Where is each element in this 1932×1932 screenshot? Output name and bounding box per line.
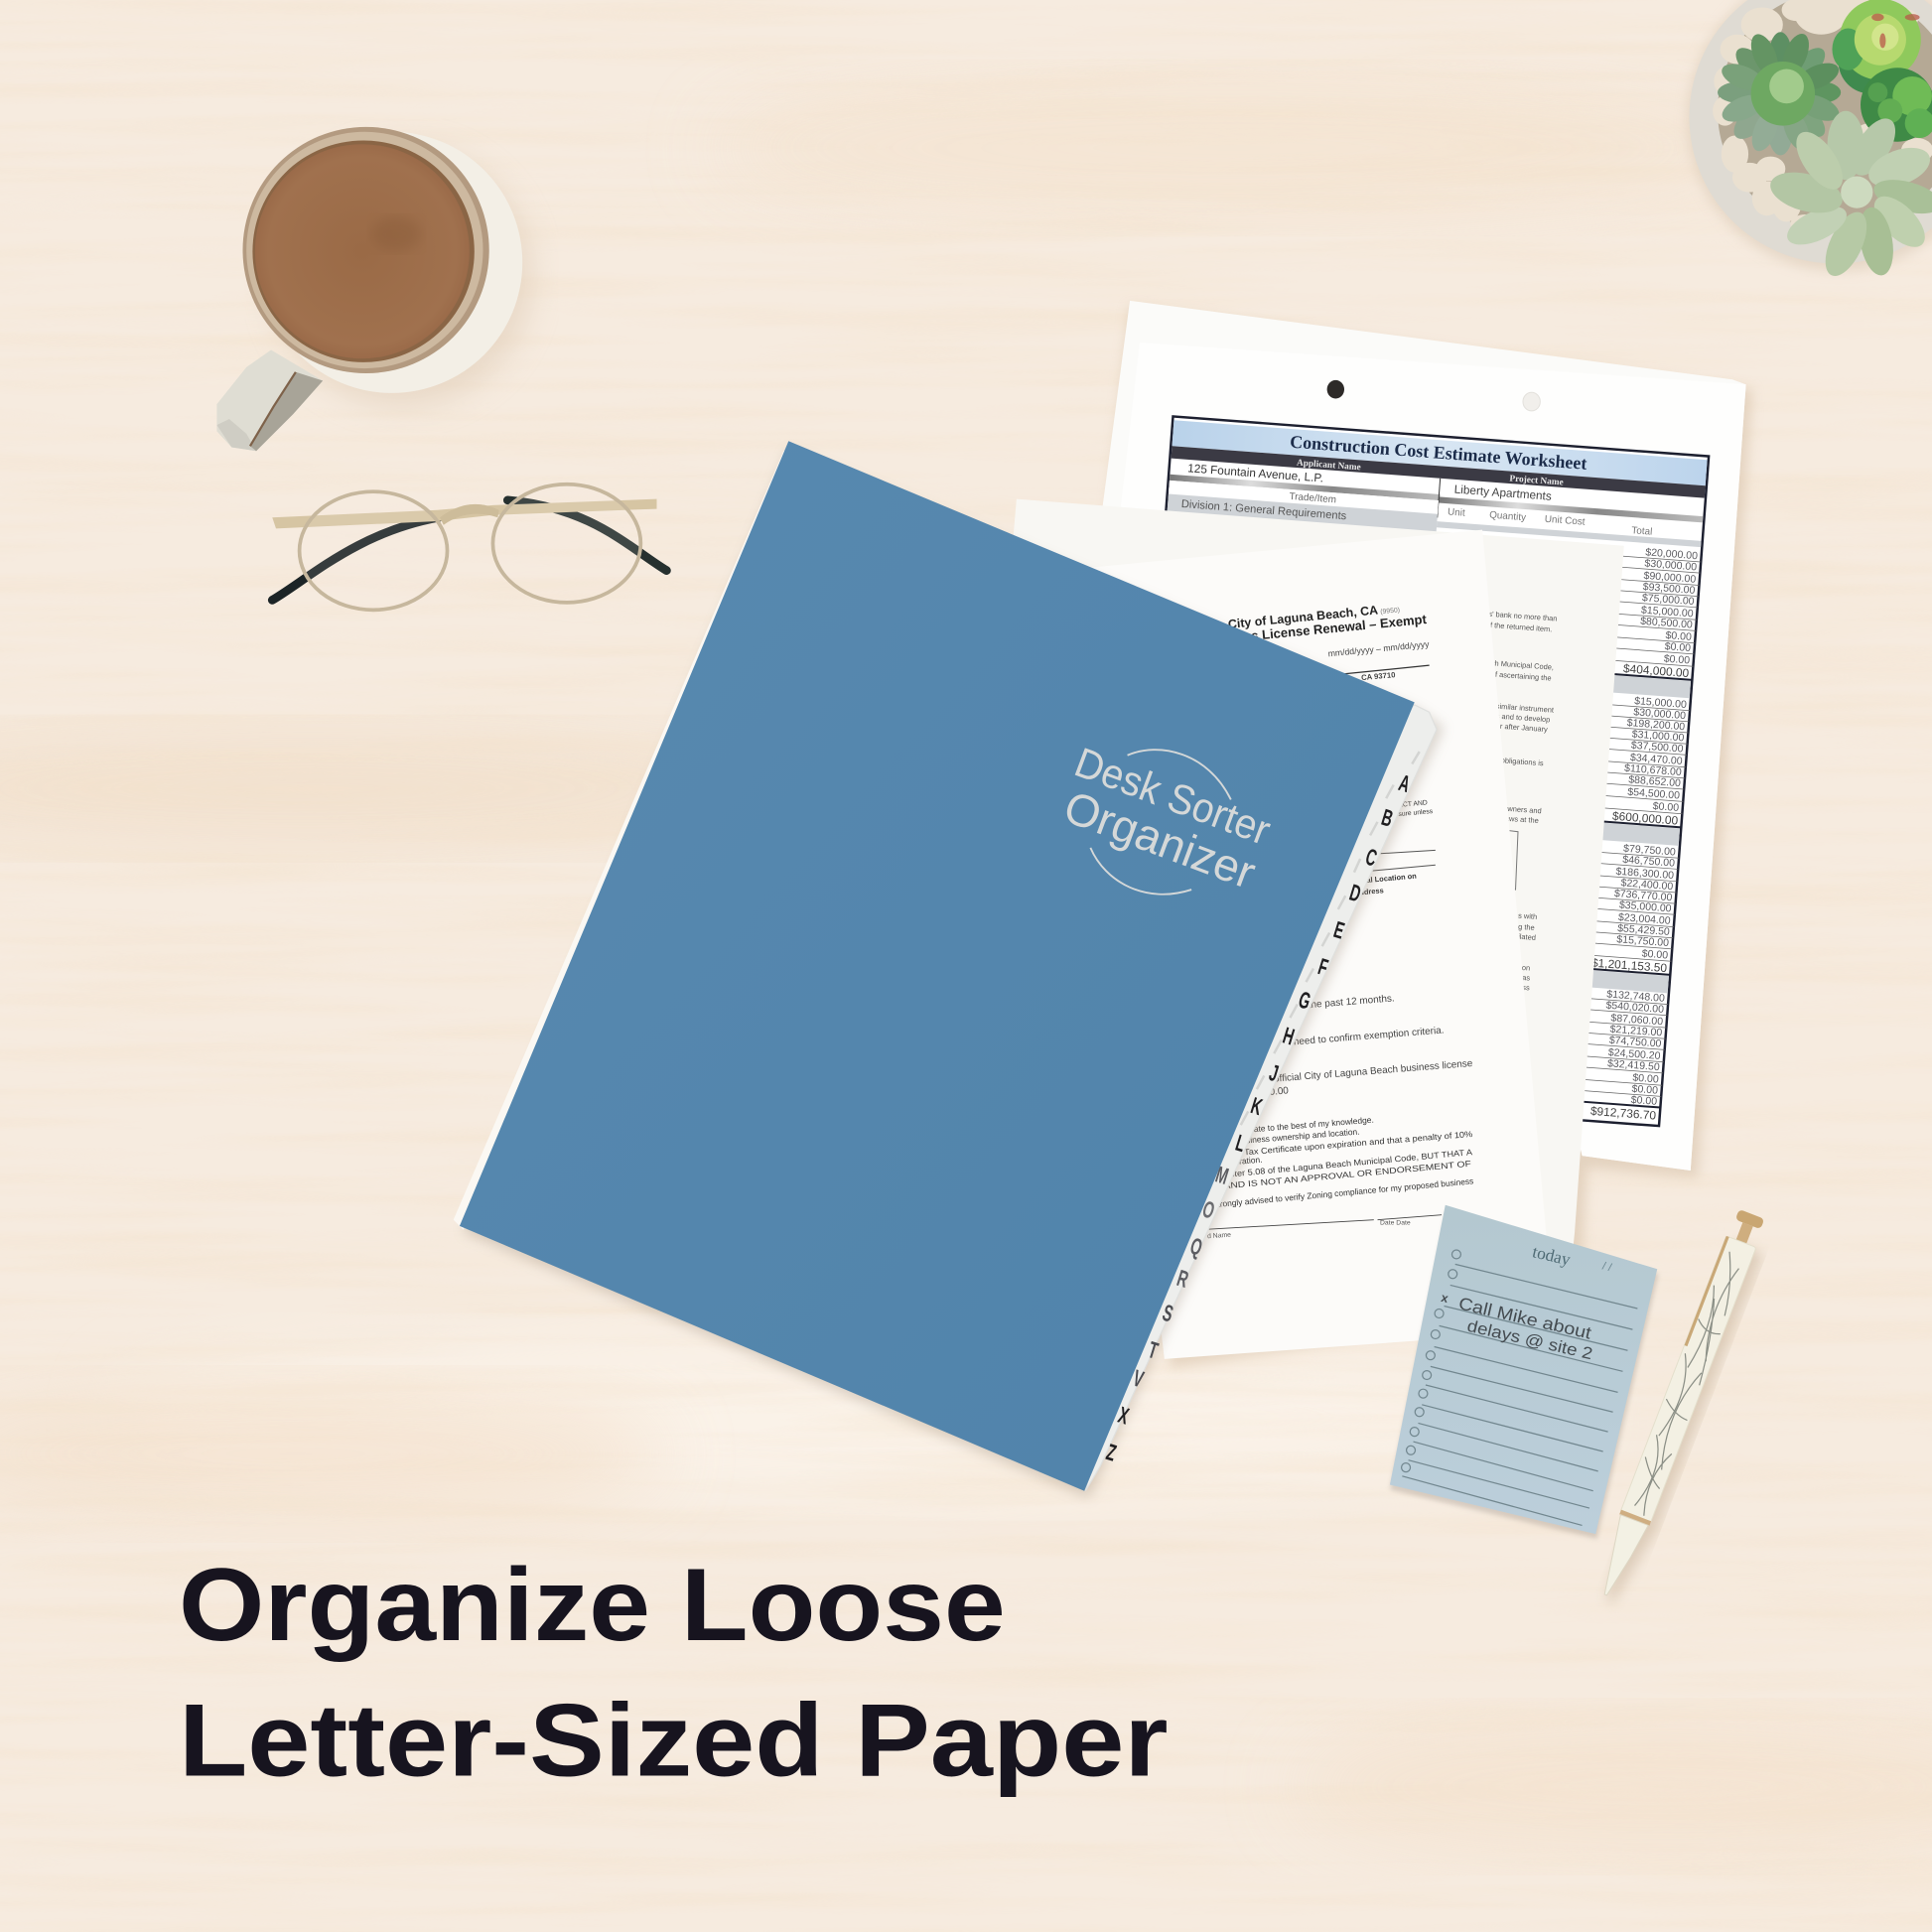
- book shadow: [464, 450, 1445, 1498]
- header rows: Applicant Name: [1297, 459, 1361, 473]
- section 4 amounts: $540,020.00: [1605, 1000, 1665, 1016]
- title band: [1173, 420, 1708, 485]
- section 1 amounts: $93,500.00: [1642, 581, 1696, 597]
- headline: Organize Loose: [179, 1548, 1006, 1663]
- note ruled lines and check circles: [1402, 1250, 1637, 1525]
- vellum sheet text: similar instrument: [1496, 702, 1555, 715]
- index tab strip: [1085, 705, 1437, 1491]
- form: City of Laguna Beach license renewal: $0.00: [1264, 1085, 1290, 1098]
- form declaration paragraph: AWS.: [1202, 1186, 1224, 1198]
- paper stack: [1013, 301, 1752, 1368]
- form declaration paragraph: and accurate to the best of my knowledge.: [1217, 1115, 1374, 1137]
- vellum sheet text: s and to develop: [1496, 712, 1551, 724]
- mug body: [261, 132, 522, 393]
- section 3 amounts: $55,429.50: [1617, 922, 1670, 938]
- tab letters: Q: [1187, 1233, 1205, 1262]
- section 2 amounts: $34,470.00: [1630, 752, 1683, 767]
- header rows: Trade/Item: [1289, 491, 1336, 505]
- logo: Desk Sorter Organizer: Desk Sorter: [1069, 739, 1277, 854]
- note handwriting: delays @ site 2: [1465, 1316, 1594, 1363]
- form declaration paragraph: ges in business ownership and location.: [1212, 1127, 1360, 1148]
- section 4 amounts: $32,419.50: [1607, 1057, 1660, 1073]
- section 2 amounts: $37,500.00: [1630, 740, 1684, 756]
- section 1 amounts: $15,000.00: [1641, 605, 1694, 620]
- section 2 amounts: $110,678.00: [1624, 762, 1682, 778]
- section 2 amounts: $198,200.00: [1626, 717, 1686, 733]
- form: City of Laguna Beach license renewal: L address: [1348, 886, 1384, 897]
- title band: Construction Cost Estimate Worksheet: [1290, 432, 1587, 474]
- section 3 amounts: $15,750.00: [1616, 933, 1670, 949]
- tab letters: A: [1396, 770, 1413, 798]
- tab letters: Z: [1103, 1440, 1119, 1467]
- logo: Desk Sorter Organizer: Organizer: [1057, 780, 1263, 898]
- tab letters: S: [1160, 1300, 1176, 1328]
- tab letters: E: [1330, 916, 1347, 945]
- form: City of Laguna Beach license renewal: Business License Renewal – Exempt: [1200, 612, 1428, 648]
- form declaration paragraph: nt.: [1207, 1206, 1217, 1217]
- vellum sheet text: eas: [1518, 973, 1531, 983]
- note shadow: [1390, 1210, 1658, 1539]
- section 3 amounts: $1,201,153.50: [1591, 956, 1668, 975]
- section 1 amounts: $0.00: [1663, 653, 1691, 666]
- section 1 amounts: $0.00: [1665, 629, 1692, 643]
- form: City of Laguna Beach license renewal: d Name: [1207, 1232, 1231, 1240]
- tab letters: K: [1248, 1093, 1265, 1121]
- form: City of Laguna Beach license renewal: Date Date: [1380, 1220, 1411, 1227]
- amount columns: [1129, 511, 1702, 1123]
- vellum sheet text: g the: [1518, 922, 1535, 932]
- header rows: Unit Cost: [1544, 514, 1586, 528]
- mug rim: [242, 127, 489, 373]
- section 1 amounts: $75,000.00: [1641, 592, 1695, 608]
- vellum sheet text: of the returned item.: [1486, 621, 1553, 633]
- succulent: right green: [1861, 68, 1932, 142]
- pen cap button: [1728, 1209, 1764, 1248]
- section 1 amounts: $90,000.00: [1643, 570, 1697, 586]
- tab letters: D: [1346, 880, 1364, 908]
- form: City of Laguna Beach license renewal: official City of Laguna Beach business license: [1274, 1058, 1473, 1085]
- header rows: 125 Fountain Avenue, L.P.: [1187, 462, 1324, 484]
- section 1 amounts: $0.00: [1664, 640, 1692, 654]
- form: City of Laguna Beach license renewal: closure unless: [1389, 808, 1434, 819]
- vellum sheet text: [1486, 610, 1558, 992]
- header rows: Unit: [1448, 506, 1465, 519]
- form: City of Laguna Beach license renewal: CA 93710: [1361, 670, 1396, 682]
- vellum sheet text: of ascertaining the: [1491, 669, 1552, 683]
- tab letters: H: [1280, 1023, 1298, 1050]
- tab letters: M: [1212, 1162, 1231, 1190]
- tab letters: J: [1266, 1060, 1282, 1087]
- section 3 amounts: $79,750.00: [1623, 843, 1676, 859]
- section 4 amounts: $21,219.00: [1609, 1024, 1663, 1038]
- section 4 amounts: $24,500.20: [1607, 1046, 1661, 1062]
- pen: [1588, 1208, 1775, 1608]
- section 3 amounts: $23,004.00: [1618, 911, 1671, 927]
- logo: Desk Sorter Organizer: [1057, 739, 1277, 898]
- tab letters: V: [1130, 1365, 1147, 1393]
- header rows: Division 1: General Requirements: [1180, 498, 1347, 522]
- section 3 amounts: $46,750.00: [1622, 854, 1675, 870]
- potted succulents: [1687, 0, 1932, 282]
- pen gold ring: [1619, 1510, 1651, 1526]
- pen barrel: [1620, 1236, 1756, 1524]
- worksheet sheet: [1119, 343, 1746, 1171]
- form declaration paragraph: after expiration.: [1204, 1155, 1263, 1169]
- tab letters: C: [1362, 844, 1380, 873]
- vellum sheet: [1013, 499, 1624, 1330]
- section 1 amounts: $404,000.00: [1623, 661, 1690, 680]
- form: City of Laguna Beach license renewal: Physical Location on: [1342, 872, 1418, 887]
- vellum sheet text: owners and: [1503, 804, 1542, 815]
- vellum sheet text: ch Municipal Code,: [1491, 658, 1554, 672]
- section 4 amounts: [1129, 936, 1669, 1123]
- vellum sheet text: ess: [1518, 983, 1530, 992]
- vellum sheet text: obligations is: [1500, 756, 1544, 767]
- vellum sheet text: ilated: [1518, 932, 1536, 942]
- pot: [1687, 0, 1932, 271]
- tab letters: F: [1315, 954, 1331, 982]
- succulent: bright green with red tips: [1832, 0, 1921, 93]
- paper shadow: [1084, 306, 1752, 1368]
- section 1 amounts: $30,000.00: [1644, 558, 1698, 573]
- headline: [179, 1548, 1169, 1798]
- section 3 amounts: $35,000.00: [1618, 899, 1672, 914]
- header rows: Quantity: [1489, 510, 1526, 523]
- form declaration paragraph: RE AND IS NOT AN APPROVAL OR ENDORSEMENT OF: [1207, 1159, 1471, 1192]
- note sheet: [1390, 1205, 1657, 1534]
- inner pages edge: [454, 449, 791, 1230]
- section 2 amounts: $0.00: [1652, 800, 1680, 814]
- tab letters: O: [1199, 1196, 1217, 1225]
- mug shadow: [271, 145, 532, 407]
- organizer book: [454, 441, 1445, 1498]
- pen shadow: [1597, 1242, 1763, 1608]
- pen tip: [1591, 1515, 1648, 1600]
- section 3 amounts: [1140, 789, 1680, 975]
- section 4 amounts: $74,750.00: [1608, 1035, 1662, 1050]
- section 2 amounts: $30,000.00: [1633, 706, 1687, 722]
- form: City of Laguna Beach license renewal: the past 12 months.: [1308, 993, 1395, 1011]
- header rows: Liberty Apartments: [1453, 483, 1552, 503]
- section 4 amounts: $0.00: [1631, 1083, 1658, 1097]
- header rows: Total: [1631, 525, 1653, 538]
- form: City of Laguna Beach license renewal: (9950): [1380, 607, 1400, 616]
- vellum sheet text: laws at the: [1503, 814, 1539, 825]
- vellum sheet text: rs' bank no more than: [1486, 610, 1558, 623]
- sticky note: today: [1390, 1205, 1658, 1539]
- lenses: [300, 491, 448, 610]
- form: City of Laguna Beach license renewal: City of Laguna Beach, CA: [1227, 603, 1379, 631]
- section 4 amounts: $0.00: [1632, 1072, 1659, 1086]
- tab letters: X: [1115, 1402, 1132, 1431]
- coffee: [255, 144, 470, 358]
- form declaration paragraph: strongly advised to verify Zoning compliance for my proposed business: [1213, 1175, 1474, 1209]
- section 1 amounts: $80,500.00: [1640, 616, 1693, 631]
- vellum sheet box: [1488, 828, 1518, 890]
- form: City of Laguna Beach license renewal: [1072, 530, 1555, 1359]
- punch holes: [1327, 380, 1540, 411]
- section 4 amounts: $0.00: [1630, 1094, 1658, 1108]
- note handwriting: Call Mike about: [1456, 1293, 1593, 1343]
- mug of coffee: [216, 127, 532, 451]
- form: City of Laguna Beach license renewal: mm/dd/yyyy – mm/dd/yyyy: [1327, 639, 1430, 658]
- tab letters: B: [1378, 804, 1396, 833]
- back sheet: [1100, 301, 1746, 1171]
- section 4 amounts: $912,736.70: [1589, 1104, 1657, 1123]
- tab letters: R: [1173, 1265, 1191, 1294]
- succulent: dark green: [1718, 30, 1843, 155]
- section 2 amounts: [1151, 641, 1691, 828]
- section 2 amounts: $600,000.00: [1612, 809, 1679, 828]
- section 2 amounts: $54,500.00: [1627, 786, 1681, 802]
- section 3 amounts: $736,770.00: [1613, 888, 1673, 903]
- succulent: pale sage: [1766, 111, 1932, 282]
- note handwriting: [1440, 1291, 1594, 1363]
- vellum sheet text: or after January: [1496, 721, 1548, 734]
- section 3 amounts: $186,300.00: [1615, 866, 1675, 882]
- form declaration paragraph: [1202, 1115, 1474, 1217]
- section 4 amounts: $132,748.00: [1606, 989, 1665, 1005]
- tab letters: T: [1145, 1337, 1161, 1365]
- book cover: [460, 441, 1415, 1491]
- form: City of Laguna Beach license renewal: ACT AND: [1398, 799, 1428, 809]
- worksheet table: [1123, 416, 1709, 1126]
- section 1 amounts: [1623, 545, 1699, 680]
- tab letters: [1103, 770, 1413, 1467]
- pebbles: [1713, 0, 1932, 234]
- mug handle: [216, 349, 323, 451]
- bridge: [440, 504, 499, 525]
- form declaration paragraph: to chapter 5.08 of the Laguna Beach Municipal Code, BUT THAT A: [1204, 1147, 1473, 1181]
- note handwriting: x: [1440, 1291, 1449, 1306]
- form: City of Laguna Beach license renewal: need to confirm exemption criteria.: [1293, 1026, 1445, 1047]
- section 3 amounts: $22,400.00: [1620, 877, 1674, 893]
- gold hinge bar: [272, 499, 656, 528]
- temple arms: [272, 517, 439, 600]
- section 3 amounts: $0.00: [1641, 948, 1669, 962]
- note heading: today: [1531, 1242, 1573, 1270]
- sticky note: today: / /: [1601, 1261, 1613, 1275]
- section 4 amounts: $87,060.00: [1610, 1012, 1664, 1028]
- section 2 amounts: $15,000.00: [1634, 695, 1687, 711]
- headline: Letter-Sized Paper: [179, 1683, 1169, 1798]
- form declaration paragraph: Business Tax Certificate upon expiration and that a penalty of 10%: [1204, 1129, 1473, 1161]
- vellum sheet text: tion: [1518, 963, 1530, 973]
- tab letters: G: [1296, 987, 1313, 1016]
- glasses: [272, 484, 666, 610]
- section 1 amounts: $20,000.00: [1645, 546, 1698, 562]
- tab letters: L: [1232, 1130, 1249, 1158]
- header rows: [1167, 446, 1706, 557]
- section 2 amounts: $88,652.00: [1628, 773, 1681, 789]
- header rows: Project Name: [1509, 475, 1564, 487]
- vellum sheet text: s with: [1518, 911, 1537, 921]
- section 2 amounts: $31,000.00: [1631, 729, 1685, 744]
